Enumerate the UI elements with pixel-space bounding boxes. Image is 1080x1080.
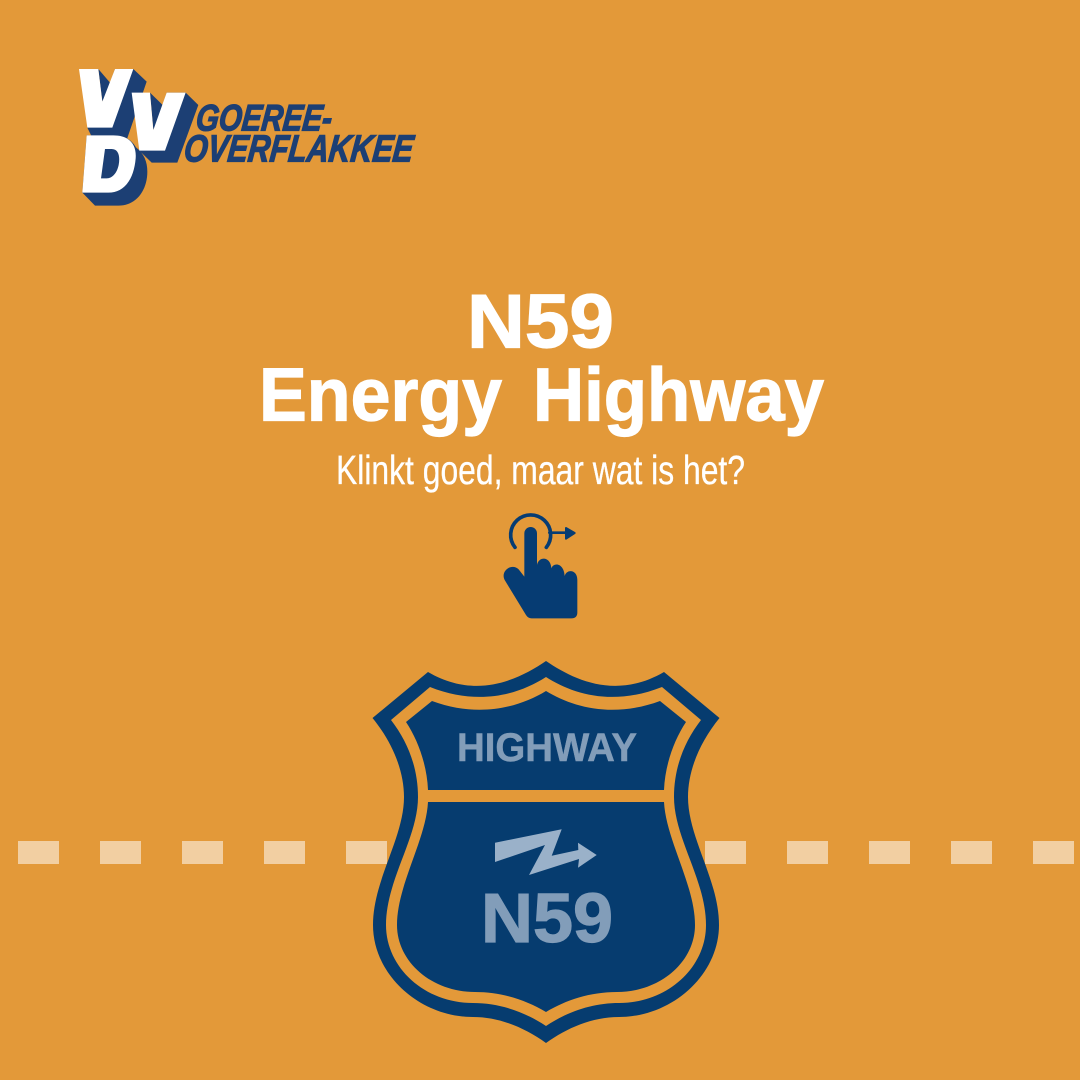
shield top panel	[406, 691, 686, 790]
logo mark: VVD letters	[79, 69, 198, 206]
title: Energy Highway: Highway	[533, 352, 824, 436]
icon: tapping hand with arrow	[504, 515, 577, 618]
title: Energy Highway: Energy	[259, 352, 502, 436]
subtitle: Klinkt goed, maar wat is het?	[336, 447, 745, 493]
road dashes	[18, 841, 1074, 864]
title: Energy Highway	[259, 352, 824, 436]
logo text: Goeree-: GOEREE-	[194, 97, 335, 138]
shield text: N59: N59	[481, 879, 613, 957]
icon: lightning arrow	[495, 829, 597, 875]
title: N59: N59	[467, 280, 614, 364]
logo: VVD Goeree-Overflakkee	[79, 69, 417, 206]
shield text: Highway: HIGHWAY	[457, 726, 637, 770]
highway shield	[372, 661, 720, 1043]
shield bottom panel	[397, 802, 695, 1012]
logo text: Overflakkee: OVERFLAKKEE	[182, 129, 417, 170]
